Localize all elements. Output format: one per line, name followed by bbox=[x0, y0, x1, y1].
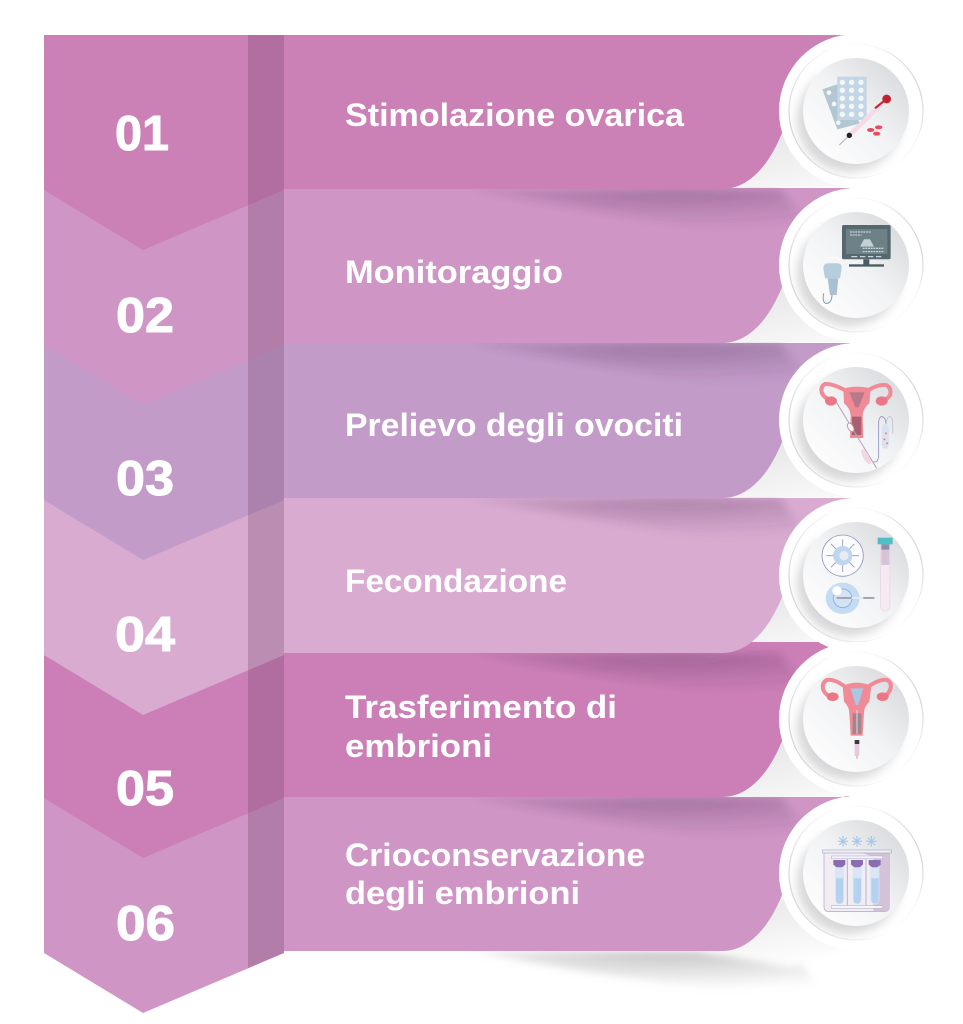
vertical dark strip bbox=[248, 35, 284, 968]
band 03: Prelievo bbox=[284, 343, 850, 498]
icon: ovum retrieval bbox=[779, 343, 933, 497]
chevron 05 bbox=[44, 655, 284, 858]
heading: Trasferimento di embrioni: Trasferimento di bbox=[345, 689, 617, 725]
number 06: 06 bbox=[116, 897, 175, 951]
shadow under band 02 bbox=[470, 343, 815, 393]
chevron 03 bbox=[44, 345, 284, 560]
heading: Fecondazione: Fecondazione bbox=[345, 563, 567, 599]
band 05: Trasferimento bbox=[284, 642, 850, 797]
number 02: 02 bbox=[116, 289, 174, 343]
heading: Crioconservazione degli embrioni: Crioconservazione bbox=[345, 837, 645, 873]
chevron 04 bbox=[44, 500, 284, 715]
heading: Crioconservazione degli embrioni bbox=[345, 837, 645, 911]
band 04: Fecondazione bbox=[284, 498, 850, 653]
chevron 02 bbox=[44, 190, 284, 405]
icon: pills and syringe bbox=[779, 34, 933, 188]
icon: embryo transfer bbox=[779, 642, 933, 796]
icon: cryopreservation bbox=[779, 796, 933, 950]
number 05: 05 bbox=[116, 762, 174, 816]
chevron 06 bbox=[44, 798, 284, 1013]
chevron 01 bbox=[44, 35, 284, 250]
heading: Stimolazione ovarica: Stimolazione ovarica bbox=[345, 97, 684, 133]
shadow under band 01 bbox=[470, 189, 815, 239]
heading: Prelievo degli ovociti: Prelievo degli ovociti bbox=[345, 407, 683, 443]
shadow under band 04 bbox=[470, 653, 815, 703]
shadow under band 05 bbox=[470, 797, 815, 847]
heading: Crioconservazione degli embrioni: degli embrioni bbox=[345, 875, 580, 911]
number 01: 01 bbox=[115, 107, 169, 161]
number 04: 04 bbox=[115, 608, 175, 662]
shadow under band 03 bbox=[470, 498, 815, 548]
band 01: Stimolazione bbox=[284, 35, 850, 189]
band 06: Crioconservazione bbox=[284, 796, 850, 968]
shadow under band 06 bbox=[470, 951, 830, 1000]
number 03: 03 bbox=[116, 452, 174, 506]
icon: ultrasound monitor and probe bbox=[779, 188, 933, 342]
heading: Monitoraggio: Monitoraggio bbox=[345, 254, 563, 290]
heading: Trasferimento di embrioni bbox=[345, 689, 617, 764]
icon: fertilisation bbox=[779, 498, 933, 652]
heading: Trasferimento di embrioni: embrioni bbox=[345, 728, 492, 764]
band 02: Monitoraggio bbox=[284, 188, 850, 343]
